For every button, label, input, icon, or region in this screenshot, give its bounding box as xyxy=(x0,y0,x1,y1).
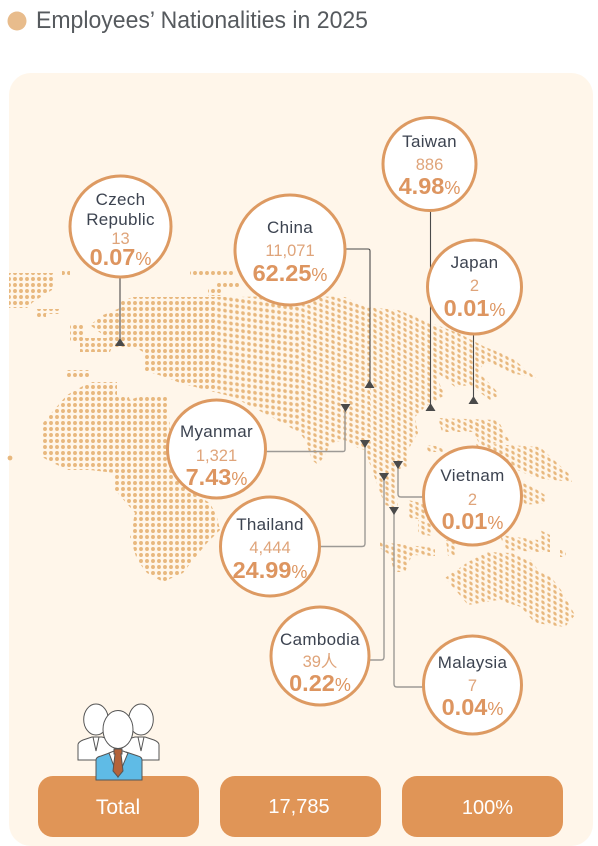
callout: Japan xyxy=(428,240,522,334)
map: Africa xyxy=(42,382,220,582)
title bullet xyxy=(8,12,26,30)
callout: Cambodia: 39人 xyxy=(303,652,337,671)
callout: Myanmar: Myanmar xyxy=(180,422,253,441)
callout: Japan: Japan xyxy=(451,253,498,272)
total box: count xyxy=(220,776,381,837)
connector: China xyxy=(345,249,374,388)
callout: Taiwan: 4.98% xyxy=(399,173,460,199)
callout: Cambodia: 0.22% xyxy=(289,670,351,696)
map: Australia xyxy=(445,552,575,627)
back right person xyxy=(121,704,159,760)
callout: Japan: 2 xyxy=(470,277,479,295)
front person xyxy=(96,710,142,780)
callout: Malaysia xyxy=(424,636,522,734)
callout: Malaysia: 7 xyxy=(468,677,477,695)
callout: Vietnam xyxy=(424,447,522,545)
connector: Japan xyxy=(468,334,478,404)
callout: China: 11,071 xyxy=(265,242,315,260)
connector: Vietnam xyxy=(393,461,423,497)
callout: Taiwan: 886 xyxy=(416,156,443,174)
connector: Thailand xyxy=(320,440,370,546)
callout: Myanmar: 7.43% xyxy=(186,464,247,490)
callout: Cambodia: Cambodia xyxy=(280,630,360,649)
callout: China xyxy=(235,195,345,305)
callout: Myanmar: 1,321 xyxy=(196,447,237,465)
callout: Myanmar xyxy=(168,400,266,498)
callout: Vietnam: 2 xyxy=(468,491,477,509)
callout: Malaysia: 0.04% xyxy=(442,694,503,720)
callout: Thailand: 24.99% xyxy=(233,557,307,583)
connector: Malaysia xyxy=(389,507,424,687)
callout: Thailand xyxy=(220,497,320,596)
callout: Czech Republic: 13 xyxy=(111,230,130,248)
connector: Myanmar xyxy=(266,404,350,452)
title text: Employees’ Nationalities in 2025 xyxy=(36,7,368,34)
callout: Czech Republic: Republic xyxy=(86,210,155,229)
title xyxy=(8,7,368,34)
callout: Vietnam: 0.01% xyxy=(442,508,503,534)
map: East and Southeast Asian islands xyxy=(438,418,500,432)
total box: percentage xyxy=(402,776,563,837)
connector: Taiwan xyxy=(426,211,436,411)
connector: Czech Republic xyxy=(115,277,125,346)
map: Eurasia xyxy=(70,290,540,515)
connector: Cambodia xyxy=(370,473,389,660)
callout: Czech Republic xyxy=(70,176,171,277)
total box: percentage: 100% xyxy=(462,797,513,819)
callout: Cambodia xyxy=(271,607,369,705)
total box: label: Total xyxy=(96,796,140,819)
callout: Czech Republic: 0.07% xyxy=(90,244,151,270)
callout: Czech Republic: Czech xyxy=(96,190,145,209)
callout: Taiwan xyxy=(383,118,476,210)
callout: Malaysia: Malaysia xyxy=(438,653,507,672)
map: northern islands xyxy=(9,273,55,308)
callout: Taiwan: Taiwan xyxy=(402,132,457,151)
total box: label xyxy=(38,776,199,837)
dotted world map xyxy=(8,270,575,627)
map: edge dots xyxy=(8,456,12,460)
callout: Thailand: 4,444 xyxy=(249,539,291,557)
callout: Thailand: Thailand xyxy=(236,515,304,534)
callout: Japan: 0.01% xyxy=(444,295,505,321)
total box: count: 17,785 xyxy=(268,796,330,818)
callout: China: China xyxy=(267,218,313,237)
callout: China: 62.25% xyxy=(253,260,327,286)
callout: Vietnam: Vietnam xyxy=(440,466,505,485)
icon: group of employees xyxy=(78,704,159,780)
back left person xyxy=(78,704,116,760)
